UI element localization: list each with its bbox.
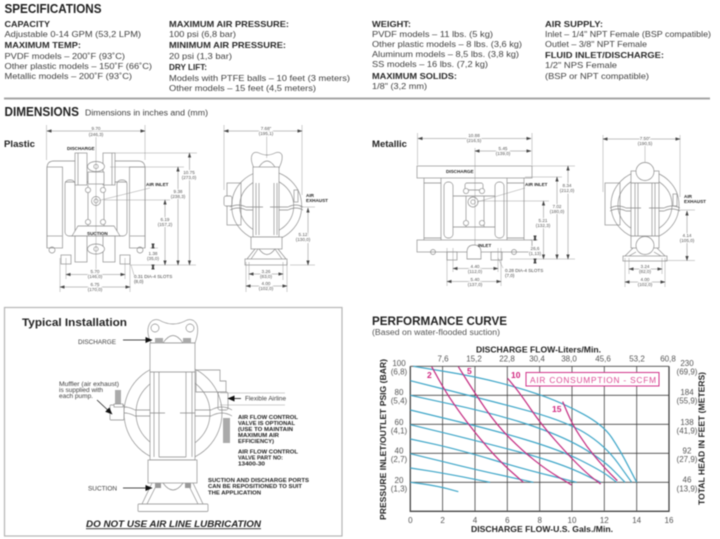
- text block: weight and solids: MAXIMUM SOLIDS:: [372, 71, 457, 81]
- callout: flexible airline: Flexible Airline: [245, 396, 286, 402]
- top axis: liters per minute: 7,6: [437, 354, 449, 364]
- dimension lines: metallic front: (132,3): [536, 223, 551, 228]
- bottom axis: gallons per minute: 4: [473, 516, 478, 525]
- dimension lines: metallic side: (82,0): [639, 269, 651, 274]
- dimension lines: metallic front: (7,0): [505, 273, 515, 278]
- drawing: metallic pump side view: [603, 135, 706, 287]
- bottom axis: gallons per minute: 12: [600, 516, 609, 525]
- dimension lines: plastic front: 9.70: [92, 126, 101, 131]
- air consumption curves: magenta: [432, 367, 617, 485]
- callout: suction: [88, 486, 152, 492]
- note: ports: CAN BE REPOSITIONED TO SUIT: [208, 484, 303, 490]
- left axis: pressure: (5,4): [391, 396, 408, 406]
- dimension lines: plastic front: 0.31 DIA-4 SLOTS: [134, 274, 172, 279]
- text block: air supply and fluid connections: Outlet – 3/8" NPT Female: [545, 39, 647, 49]
- dimension lines: metallic side: 4.14: [683, 233, 692, 238]
- dimension lines: plastic front: (273,0): [182, 175, 197, 180]
- dimension lines: metallic front: (139,0): [496, 151, 511, 156]
- dimension lines: plastic side: 4.00: [262, 281, 271, 286]
- right axis: total head: 184: [680, 388, 694, 397]
- top axis: liters per minute: DISCHARGE FLOW-Liters/Min.: [476, 344, 601, 354]
- dimension lines: metallic front: 26,6: [531, 246, 540, 251]
- dimension lines: metallic front: 5.21: [539, 218, 548, 223]
- text block: weight and solids: 1/8" (3,2 mm): [372, 81, 427, 91]
- top axis: liters per minute: 38,0: [561, 354, 577, 364]
- callout: discharge: [78, 339, 152, 346]
- note: ports: SUCTION AND DISCHARGE PORTS: [208, 478, 309, 484]
- heading: specifications: SPECIFICATIONS: [4, 2, 102, 16]
- left axis: pressure: [378, 359, 408, 520]
- dimension lines: plastic side: 5.12: [299, 232, 308, 237]
- dimension lines: metallic side: EXHAUST: [684, 199, 706, 204]
- right axis: total head: (13,9): [677, 484, 698, 494]
- text block: weight and solids: Other plastic models – 8 lbs. (3,6 kg): [372, 39, 522, 49]
- dimension lines: metallic front: AIR INLET: [525, 182, 548, 187]
- note: air flow control valve: 13400-30: [238, 462, 265, 468]
- dimension lines: plastic side: (195,1): [259, 131, 274, 136]
- left axis: pressure: (4,1): [391, 426, 408, 436]
- dimension lines: plastic front: [46, 125, 197, 292]
- right axis: total head: (55,9): [677, 396, 698, 406]
- left axis: pressure: 100: [392, 359, 406, 368]
- drawing: pump side view: [110, 320, 232, 512]
- heading: performance curve: [372, 314, 507, 337]
- top axis: liters per minute: 30,4: [529, 354, 545, 364]
- callout: flexible airline: [220, 393, 286, 405]
- top axis: liters per minute: [437, 344, 676, 364]
- text block: capacity and temperature: PVDF models – 200˚F (93˚C): [4, 51, 125, 61]
- text block: weight and solids: WEIGHT:: [372, 19, 411, 29]
- text block: air pressure and dry lift: 100 psi (6,8 bar): [169, 29, 236, 39]
- text block: air supply and fluid connections: (BSP or NPT compatible): [545, 71, 649, 81]
- drawing: plastic pump front view: [46, 125, 197, 292]
- warning: no lubrication: DO NOT USE AIR LINE LUBRICATION: [86, 519, 261, 529]
- dimension lines: metallic side: 4.00: [641, 277, 650, 282]
- heading: typical installation: Typical Installation: [22, 317, 127, 329]
- heading: dimensions: DIMENSIONS: [4, 104, 79, 119]
- top axis: liters per minute: 22,8: [499, 354, 515, 364]
- dimension lines: metallic front: (180,0): [550, 209, 565, 214]
- callout: muffler: is supplied with: [59, 387, 104, 394]
- right axis: total head: 138: [680, 418, 694, 427]
- left axis: pressure: 60: [395, 418, 404, 427]
- left axis: pressure: (6,8): [391, 368, 408, 376]
- dimension lines: metallic front: (137,0): [468, 282, 483, 287]
- curve labels: 5: [467, 366, 472, 376]
- dimension lines: metallic front: (112,0): [468, 269, 483, 274]
- text block: weight and solids: [372, 19, 522, 91]
- callout: muffler: each pump.: [59, 393, 93, 400]
- note: ports: THE APPLICATION: [208, 490, 261, 496]
- dimension lines: metallic front: 0.28 DIA-4 SLOTS: [505, 268, 543, 273]
- text block: capacity and temperature: Other plastic models – 150˚F (66˚C): [4, 61, 152, 71]
- curve labels: 10: [511, 370, 521, 380]
- panel: typical installation: [4, 308, 342, 536]
- dimension lines: metallic side: [603, 135, 706, 287]
- dimension lines: plastic front: (238,3): [171, 194, 186, 199]
- curve labels: 2: [427, 370, 432, 380]
- right axis: total head: (27,9): [677, 455, 698, 464]
- note: air flow control valve: VALVE PART NO:: [238, 456, 283, 462]
- dimension lines: metallic side: 7.50": [640, 136, 651, 141]
- text block: capacity and temperature: [4, 19, 152, 81]
- bottom axis: gallons per minute: 8: [537, 516, 542, 525]
- label: plastic: Plastic: [4, 139, 35, 150]
- callout: muffler: [59, 381, 119, 414]
- right axis: total head: 46: [683, 476, 692, 484]
- curve labels: [427, 366, 562, 414]
- text block: air supply and fluid connections: FLUID INLET/DISCHARGE:: [545, 50, 664, 60]
- note: air flow control valve: (USE TO MAINTAIN: [238, 427, 293, 433]
- dimension lines: plastic side: 7.68": [261, 126, 272, 131]
- bottom axis: gallons per minute: 0: [408, 516, 413, 525]
- dimension lines: plastic front: (146,0): [88, 274, 103, 279]
- drawing: plastic pump side view: [224, 125, 328, 292]
- dimension lines: plastic side: 3.26: [262, 269, 271, 274]
- right axis: total head: (41,9): [677, 426, 698, 436]
- dimension lines: metallic side: AIR: [684, 194, 693, 199]
- note: air flow control valve: VALVE IS OPTIONAL: [238, 421, 296, 427]
- text block: weight and solids: SS models – 16 lbs. (7,2 kg): [372, 59, 488, 69]
- text block: capacity and temperature: Adjustable 0-14 GPM (53,2 LPM): [4, 29, 141, 39]
- text block: air pressure and dry lift: [169, 19, 350, 93]
- right axis: total head: [677, 359, 706, 505]
- dimension lines: metallic front: (212,0): [560, 188, 575, 193]
- dimension lines: metallic front: DISCHARGE: [446, 169, 474, 174]
- dimension lines: metallic front: [418, 133, 575, 287]
- right axis: total head: TOTAL HEAD IN FEET (METERS): [696, 372, 706, 505]
- dimension lines: metallic side: (102,0): [638, 282, 653, 287]
- dimension lines: plastic front: (157,2): [158, 222, 173, 227]
- bottom axis: gallons per minute: 2: [440, 516, 445, 525]
- dimension lines: metallic front: 4.40: [471, 264, 480, 269]
- right axis: total head: 230: [680, 359, 694, 368]
- callout: discharge: DISCHARGE: [78, 339, 116, 346]
- text block: air supply and fluid connections: [545, 19, 711, 81]
- text block: capacity and temperature: MAXIMUM TEMP:: [4, 40, 81, 50]
- dimension lines: metallic side: (190,5): [638, 141, 653, 146]
- dimension lines: metallic side: (105,0): [680, 238, 695, 243]
- left axis: pressure: 80: [395, 388, 404, 397]
- text block: air pressure and dry lift: Other models – 15 feet (4,5 meters): [169, 83, 316, 93]
- text block: capacity and temperature: CAPACITY: [4, 19, 50, 29]
- bottom axis: gallons per minute: 6: [505, 516, 510, 525]
- legend: air consumption: AIR CONSUMPTION - SCFM: [530, 375, 656, 385]
- dimension lines: plastic side: (130,0): [296, 237, 311, 242]
- heading: performance curve: (Based on water-flooded suction): [372, 328, 500, 337]
- chart: performance curve: [378, 344, 706, 534]
- text block: air supply and fluid connections: 1/2" NPS Female: [545, 60, 617, 70]
- right axis: total head: (69,9): [677, 368, 698, 376]
- left axis: pressure: 40: [395, 446, 404, 456]
- dimension lines: plastic front: SUCTION: [87, 231, 108, 236]
- text block: air pressure and dry lift: DRY LIFT:: [169, 62, 207, 72]
- top axis: liters per minute: 53,2: [629, 354, 645, 364]
- dimension lines: plastic front: 6.19: [161, 217, 170, 222]
- dimension lines: metallic front: (216,5): [467, 138, 482, 143]
- heading: dimensions: [4, 104, 208, 119]
- callout: muffler: Muffler (air exhaust): [59, 381, 119, 388]
- dimension lines: plastic front: (246,3): [89, 132, 104, 137]
- dimension lines: plastic front: (170,0): [88, 287, 103, 292]
- bottom axis: gallons per minute: 16: [665, 516, 674, 525]
- dimension lines: plastic front: 6.75: [91, 282, 100, 287]
- dimension lines: plastic front: (8,0): [134, 279, 144, 284]
- dimension lines: plastic side: EXHAUST: [306, 198, 328, 203]
- text block: air supply and fluid connections: AIR SUPPLY:: [545, 19, 603, 29]
- callout: suction: SUCTION: [88, 486, 117, 492]
- dimension lines: metallic front: 8.34: [563, 183, 572, 188]
- label: metallic: Metallic: [372, 139, 407, 150]
- chart grid: [410, 366, 669, 511]
- note: air flow control valve: MAXIMUM AIR: [238, 433, 279, 439]
- dimension lines: metallic front: 10.88: [468, 133, 480, 138]
- dimension lines: plastic front: 9.38: [174, 189, 183, 194]
- text block: air pressure and dry lift: MINIMUM AIR PRESSURE:: [169, 40, 286, 50]
- top axis: liters per minute: 15,2: [466, 354, 482, 364]
- text block: weight and solids: Aluminum models – 8,5 lbs. (3,8 kg): [372, 49, 519, 59]
- dimension lines: plastic front: (35,0): [147, 256, 159, 261]
- text block: weight and solids: PVDF models – 11 lbs. (5 kg): [372, 29, 493, 39]
- dimension lines: plastic front: 1.38: [149, 251, 158, 256]
- dimension lines: metallic front: 5.45: [499, 146, 508, 151]
- text block: air pressure and dry lift: MAXIMUM AIR PRESSURE:: [169, 19, 289, 29]
- dimension lines: metallic front: 7.02: [553, 204, 562, 209]
- bottom axis: gallons per minute: DISCHARGE FLOW-U.S. Gals./Min.: [471, 524, 613, 534]
- drawing: metallic pump front view: [417, 133, 575, 287]
- left axis: pressure: 20: [395, 476, 404, 485]
- curve labels: 15: [552, 404, 562, 414]
- dimension lines: metallic front: (1,13): [529, 251, 541, 256]
- heading: dimensions: Dimensions in inches and (mm): [85, 108, 208, 118]
- text block: air pressure and dry lift: 20 psi (1,3 bar): [169, 51, 232, 61]
- dimension lines: metallic front: INLET: [478, 243, 491, 248]
- dimension lines: plastic front: AIR INLET: [146, 182, 169, 187]
- dimension lines: metallic front: 5.40: [471, 277, 480, 282]
- heading: performance curve: PERFORMANCE CURVE: [372, 314, 507, 328]
- dimension lines: metallic side: 3.24: [641, 264, 650, 269]
- note: air flow control valve: EFFICIENCY): [238, 439, 274, 445]
- dimension lines: plastic front: DISCHARGE: [67, 146, 95, 151]
- flow curves: cyan: [410, 366, 637, 492]
- bottom axis: gallons per minute: 14: [632, 516, 642, 525]
- note: air flow control valve: AIR FLOW CONTROL: [238, 450, 299, 456]
- note: ports: [208, 478, 309, 496]
- left axis: pressure: (1,3): [391, 484, 408, 494]
- dimension lines: plastic side: AIR: [306, 193, 315, 198]
- dimension lines: plastic side: (102,0): [259, 286, 274, 291]
- bottom axis: gallons per minute: 10: [568, 516, 577, 525]
- top axis: liters per minute: 60,8: [660, 354, 676, 364]
- top axis: liters per minute: 45,6: [595, 354, 611, 364]
- dimension lines: plastic side: [224, 125, 328, 292]
- note: air flow control valve: [238, 415, 299, 468]
- dimension lines: plastic front: 5.70: [91, 269, 100, 274]
- bottom axis: gallons per minute: [408, 516, 674, 534]
- right axis: total head: 92: [683, 446, 692, 456]
- text block: air supply and fluid connections: Inlet – 1/4" NPT Female (BSP compatible): [545, 29, 711, 39]
- left axis: pressure: (2,7): [391, 455, 408, 464]
- text block: capacity and temperature: Metallic models – 200˚F (93˚C): [4, 71, 132, 81]
- dimension lines: plastic side: (83,0): [260, 274, 272, 279]
- note: air flow control valve: AIR FLOW CONTROL: [238, 415, 299, 421]
- text block: air pressure and dry lift: Models with PTFE balls – 10 feet (3 meters): [169, 73, 350, 83]
- left axis: pressure: PRESSURE INLET/OUTLET PSIG (BAR): [378, 359, 388, 520]
- dimension lines: plastic front: 10.75: [183, 170, 195, 175]
